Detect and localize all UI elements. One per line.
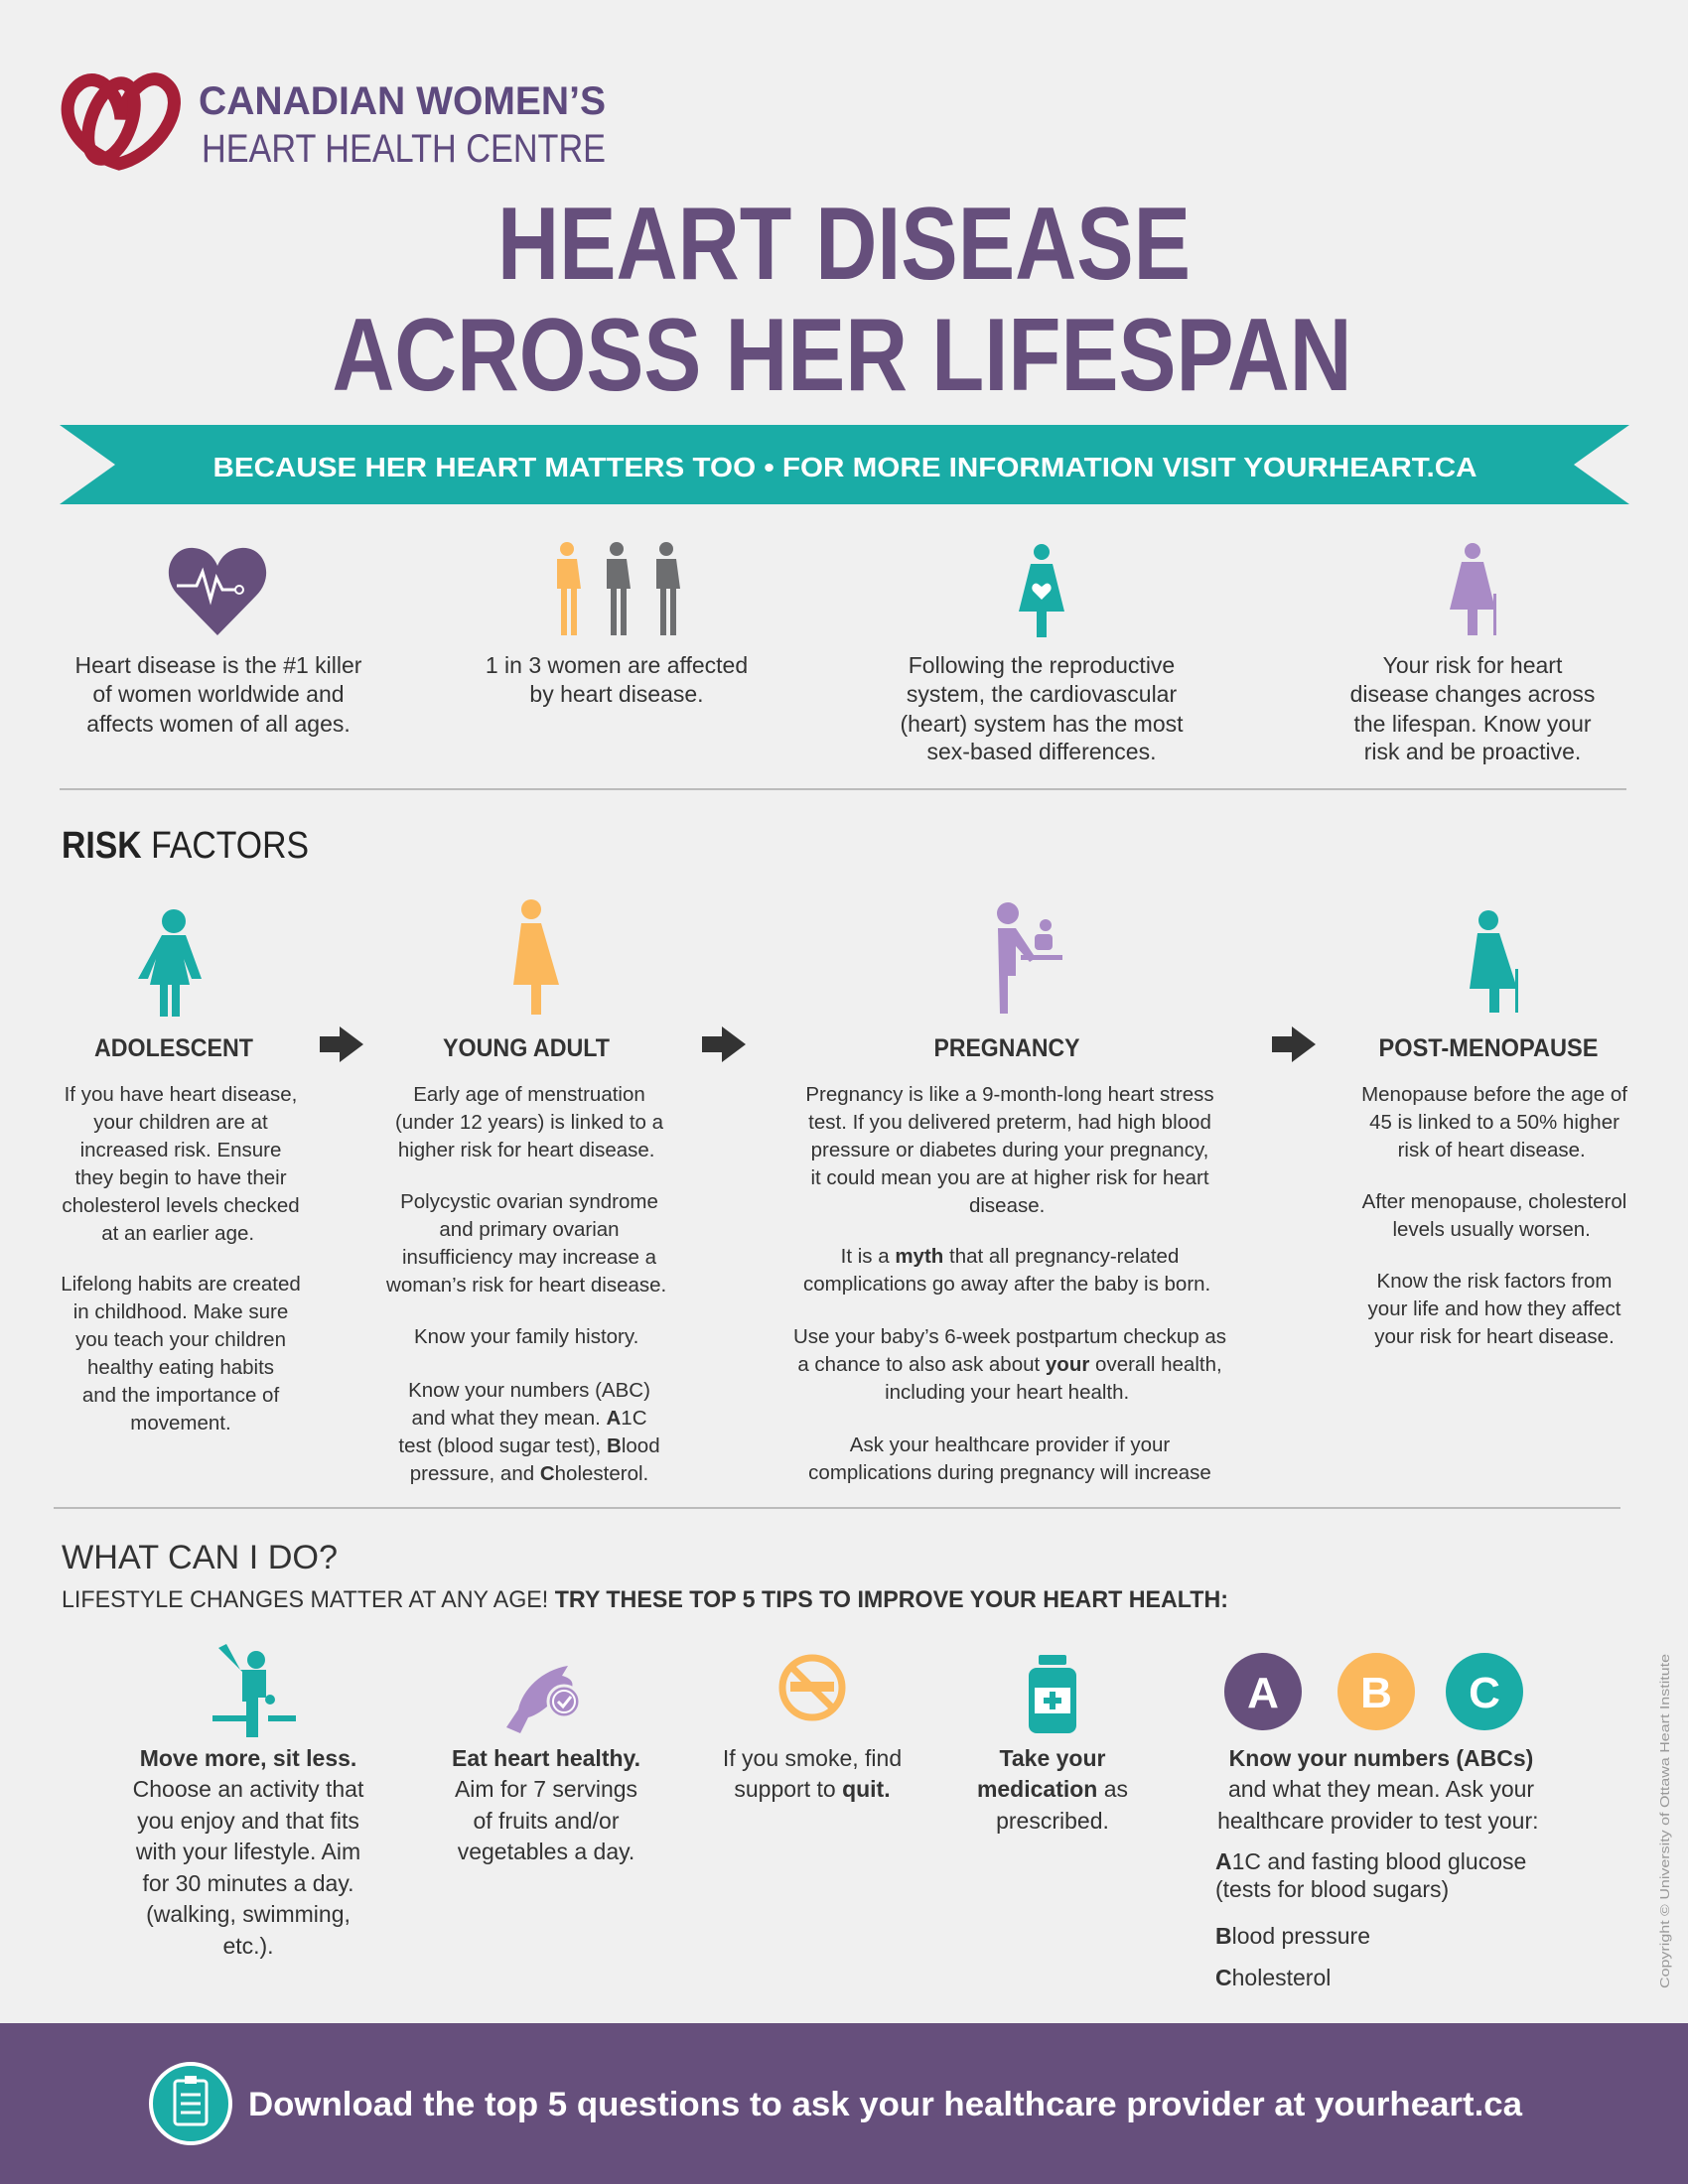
text: adolescent: movement. <box>130 1412 231 1434</box>
icon: post-menopause woman <box>1470 910 1518 1013</box>
banner: BECAUSE HER HEART MATTERS TOO • FOR MORE INFORMATION VISIT YOURHEART.CA <box>212 452 1477 482</box>
heading: what can i do: WHAT CAN I DO? <box>62 1539 338 1576</box>
stat 1: heart: of women worldwide and <box>92 681 345 707</box>
subtitle: LIFESTYLE CHANGES MATTER AT ANY AGE! TRY THESE TOP 5 TIPS TO IMPROVE YOUR HEART HEALTH: <box>62 1586 1228 1613</box>
stat 1: heart: affects women of all ages. <box>86 711 351 737</box>
icon: ABC circles: C <box>1469 1669 1500 1717</box>
icon: woman with heart <box>1019 544 1064 637</box>
text: post-menopause: your risk for heart disease. <box>1374 1325 1615 1348</box>
text: adolescent: increased risk. Ensure <box>80 1139 281 1161</box>
tip 5: healthcare provider to test your: <box>1217 1808 1539 1834</box>
text: post-menopause: After menopause, cholesterol <box>1362 1190 1626 1213</box>
text: adolescent: at an earlier age. <box>101 1222 254 1245</box>
stat 3: reproductive: Following the reproductive <box>909 652 1175 678</box>
text: adolescent: they begin to have their <box>74 1166 287 1189</box>
stat 2: 1 in 3: by heart disease. <box>529 681 704 707</box>
stat 4: lifespan: disease changes across <box>1350 681 1595 707</box>
tip 5: (tests for blood sugars) <box>1215 1876 1449 1902</box>
stat 3: reproductive <box>900 544 1184 764</box>
text: pregnancy: It is a myth that all pregnancy-related <box>841 1245 1179 1268</box>
tip 5: A1C and fasting blood glucose <box>1215 1848 1526 1874</box>
text: post-menopause: levels usually worsen. <box>1392 1218 1591 1241</box>
stat 4: lifespan: the lifespan. Know your <box>1353 711 1592 737</box>
logo <box>68 77 606 171</box>
text: young adult: and primary ovarian <box>439 1218 620 1241</box>
text: adolescent: your children are at <box>93 1111 268 1134</box>
title <box>332 187 1352 413</box>
tip 3: If you smoke, find <box>723 1745 902 1771</box>
tip 4: medication as <box>977 1776 1128 1802</box>
icon: fish <box>506 1666 580 1733</box>
text: pregnancy: test. If you delivered preterm, had high blood <box>808 1111 1211 1134</box>
stat 3: reproductive: system, the cardiovascular <box>907 681 1177 707</box>
tip 1: for 30 minutes a day. <box>142 1870 354 1896</box>
text: pregnancy: it could mean you are at higher risk for heart <box>810 1166 1209 1189</box>
text: adolescent: you teach your children <box>75 1328 286 1351</box>
arrow 2 <box>702 1026 746 1062</box>
tip 5: Blood pressure <box>1215 1923 1370 1949</box>
tip 4: prescribed. <box>996 1808 1109 1834</box>
icon: heart with ecg <box>169 548 266 635</box>
text: young adult: insufficiency may increase a <box>402 1246 657 1269</box>
tip 2: of fruits and/or <box>473 1808 620 1834</box>
stat 3: reproductive: (heart) system has the most <box>900 711 1184 737</box>
footer <box>0 2023 1688 2184</box>
stat 4: lifespan: Your risk for heart <box>1383 652 1563 678</box>
text: post-menopause: risk of heart disease. <box>1398 1139 1586 1161</box>
text: young adult: Polycystic ovarian syndrome <box>400 1190 658 1213</box>
text: pregnancy: complications during pregnancy will increase <box>808 1461 1211 1484</box>
text: young adult: pressure, and Cholesterol. <box>410 1462 648 1485</box>
icon: ABC circles: B <box>1360 1669 1392 1717</box>
arrow 1 <box>320 1026 363 1062</box>
heading: risk factors: RISK FACTORS <box>62 825 309 867</box>
text: adolescent: If you have heart disease, <box>65 1083 297 1106</box>
icon: adolescent girl <box>138 909 202 1017</box>
footer text: Download the top 5 questions to ask your healthcare provider at yourheart.ca <box>248 2086 1523 2123</box>
icon: no smoking <box>782 1658 842 1717</box>
heading: adolescent: ADOLESCENT <box>94 1034 253 1062</box>
text: pregnancy: complications go away after the baby is born. <box>803 1273 1210 1296</box>
text: post-menopause: your life and how they affect <box>1368 1297 1621 1320</box>
text: post-menopause: Menopause before the age of <box>1361 1083 1627 1106</box>
title: HEART DISEASE <box>497 187 1191 302</box>
icon: ABC circles: A <box>1247 1669 1279 1717</box>
tip 1: with your lifestyle. Aim <box>135 1839 360 1864</box>
text: young adult: test (blood sugar test), Blood <box>398 1434 660 1457</box>
text: young adult: (under 12 years) is linked to a <box>395 1111 664 1134</box>
tip 2: vegetables a day. <box>458 1839 634 1864</box>
text: adolescent: Lifelong habits are created <box>61 1273 301 1296</box>
stat 3: reproductive: sex-based differences. <box>927 739 1156 764</box>
arrow 3 <box>1272 1026 1316 1062</box>
text: pregnancy: Pregnancy is like a 9-month-long heart stress <box>805 1083 1214 1106</box>
text: pregnancy: including your heart health. <box>885 1381 1129 1404</box>
heading: young adult: YOUNG ADULT <box>443 1034 610 1062</box>
icon: older woman <box>1450 543 1496 635</box>
tip 1: (walking, swimming, <box>146 1901 351 1927</box>
logo: HEART HEALTH CENTRE <box>202 127 606 171</box>
text: pregnancy: a chance to also ask about your overall health, <box>797 1353 1222 1376</box>
icon: mother with baby <box>997 902 1062 1014</box>
tip 1: Move more, sit less. <box>140 1745 356 1771</box>
logo text: CANADIAN WOMEN’S <box>199 79 606 123</box>
heading: post-menopause: POST-MENOPAUSE <box>1378 1034 1599 1062</box>
tip 5: Cholesterol <box>1215 1965 1331 1990</box>
icon: logo rings <box>68 77 174 165</box>
stat 1: heart: Heart disease is the #1 killer <box>75 652 362 678</box>
tip 5: Know your numbers (ABCs) <box>1229 1745 1533 1771</box>
stat 1: heart <box>75 548 362 737</box>
icon: ABC circles <box>1224 1653 1523 1730</box>
stat 4: lifespan <box>1350 543 1595 764</box>
tip 1: Choose an activity that <box>133 1776 364 1802</box>
tip 2: Aim for 7 servings <box>455 1776 637 1802</box>
text: pregnancy: pressure or diabetes during your pregnancy, <box>811 1139 1208 1161</box>
text: young adult: higher risk for heart disease. <box>398 1139 654 1161</box>
tip 4: Take your <box>1000 1745 1106 1771</box>
stat 2: 1 in 3: 1 in 3 women are affected <box>486 652 748 678</box>
icon: young adult woman <box>513 899 559 1015</box>
tip 1: etc.). <box>222 1933 274 1959</box>
tip 2: Eat heart healthy. <box>452 1745 640 1771</box>
icon: clipboard <box>151 2064 230 2143</box>
icon: move <box>212 1644 296 1737</box>
text: post-menopause: Know the risk factors from <box>1377 1270 1612 1293</box>
text: pregnancy: Ask your healthcare provider if your <box>850 1433 1170 1456</box>
text: pregnancy: disease. <box>969 1194 1045 1217</box>
icon: medication bottle <box>1029 1655 1076 1733</box>
text: pregnancy: Use your baby’s 6-week postpartum checkup as <box>793 1325 1226 1348</box>
text: young adult: Early age of menstruation <box>413 1083 645 1106</box>
title: ACROSS HER LIFESPAN <box>332 298 1352 413</box>
icon: three women <box>557 542 680 635</box>
text: adolescent: and the importance of <box>82 1384 279 1407</box>
tip 1: you enjoy and that fits <box>137 1808 359 1834</box>
stat 2: 1 in 3 <box>486 542 748 707</box>
text: adolescent: in childhood. Make sure <box>73 1300 288 1323</box>
text: young adult: woman’s risk for heart disease. <box>385 1274 666 1297</box>
stat 4: lifespan: risk and be proactive. <box>1364 739 1581 764</box>
heading: pregnancy: PREGNANCY <box>933 1034 1080 1062</box>
text: young adult: Know your numbers (ABC) <box>408 1379 650 1402</box>
text: post-menopause: 45 is linked to a 50% higher <box>1369 1111 1619 1134</box>
text: young adult: Know your family history. <box>414 1325 638 1348</box>
text: adolescent: cholesterol levels checked <box>62 1194 300 1217</box>
text: young adult: and what they mean. A1C <box>411 1407 647 1430</box>
copyright: Copyright © University of Ottawa Heart Institute <box>1657 1654 1672 1988</box>
tip 5: and what they mean. Ask your <box>1228 1776 1534 1802</box>
banner <box>60 425 1629 504</box>
tip 3: support to quit. <box>734 1776 891 1802</box>
text: adolescent: healthy eating habits <box>87 1356 274 1379</box>
